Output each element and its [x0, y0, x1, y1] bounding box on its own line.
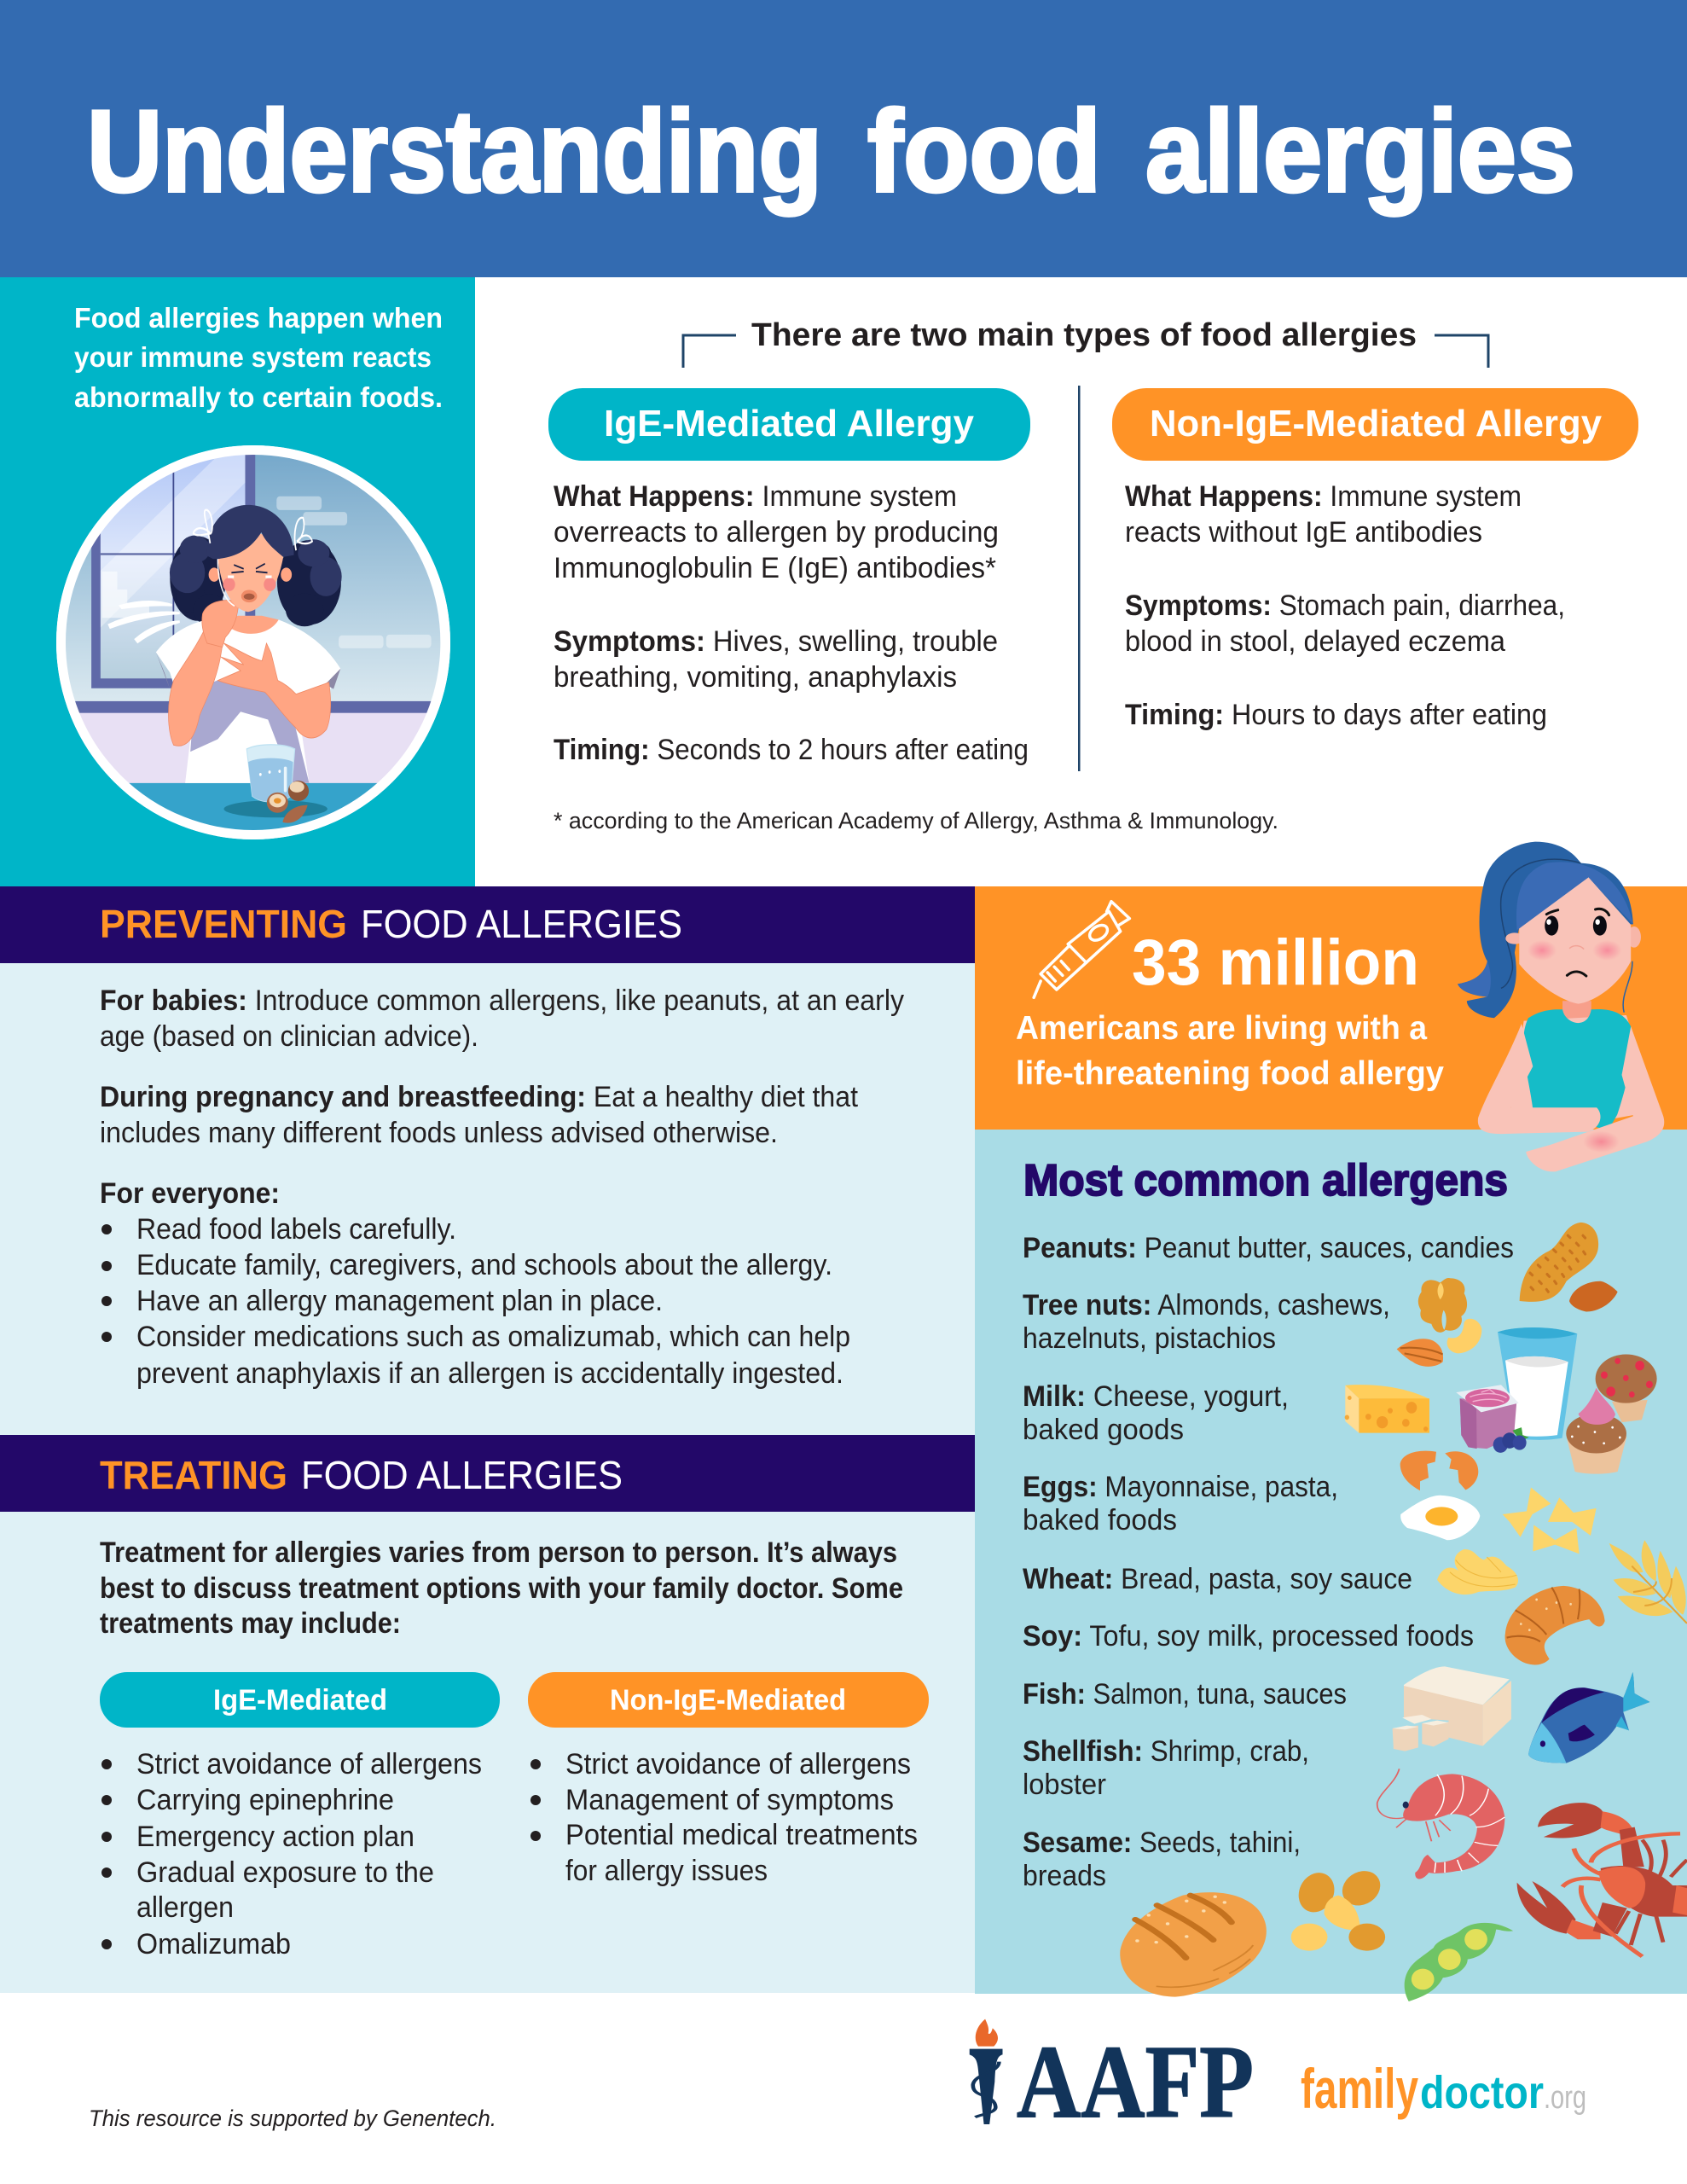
- header banner: [0, 0, 1687, 277]
- allergen list: Tree nuts: Almonds, cashews,: [1023, 1289, 1390, 1321]
- IgE details: [554, 480, 1029, 766]
- allergen list: baked foods: [1023, 1504, 1177, 1536]
- top hair: [207, 505, 294, 559]
- allergen list: Soy: Tofu, soy milk, processed foods: [1023, 1620, 1474, 1653]
- icon: tofu: [1393, 1666, 1511, 1751]
- IgE details: Symptoms: Hives, swelling, trouble: [554, 625, 998, 658]
- band heading: treating: FOOD ALLERGIES: [301, 1453, 623, 1497]
- pill heading: IgE-mediated: IgE-Mediated Allergy: [604, 403, 975, 444]
- stat text: life-threatening food allergy: [1016, 1055, 1444, 1092]
- non-IgE details: What Happens: Immune system: [1125, 480, 1522, 513]
- face: [217, 533, 283, 612]
- list: non-IgE treatments: for allergy issues: [565, 1855, 768, 1887]
- non-IgE details: blood in stool, delayed eczema: [1125, 625, 1505, 658]
- panel: Non-IgE-mediated allergy: [1112, 388, 1638, 731]
- illustration: foods upper: [1345, 1223, 1687, 1664]
- prevention advice: includes many different foods unless advised otherwise.: [100, 1117, 778, 1149]
- stat text: [1016, 926, 1444, 1092]
- allergen list: baked goods: [1023, 1414, 1184, 1446]
- treatment intro: best to discuss treatment options with your family doctor. Some: [100, 1572, 903, 1605]
- IgE details: Timing: Seconds to 2 hours after eating: [554, 734, 1029, 766]
- list: IgE treatments: [101, 1748, 482, 1960]
- allergen list: lobster: [1023, 1769, 1106, 1801]
- pill: non-IgE-mediated treatments: Non-IgE-Mediated: [610, 1684, 846, 1716]
- band heading: preventing: PREVENTING: [100, 902, 347, 946]
- list: for everyone: Have an allergy management plan in place.: [136, 1285, 663, 1317]
- panel: definition with coughing woman: [0, 277, 475, 886]
- prevention advice: During pregnancy and breastfeeding: Eat a healthy diet that: [100, 1081, 859, 1113]
- arm right (her left): [169, 624, 223, 746]
- hair ties: [194, 510, 212, 543]
- heading: two main types: There are two main types of food allergies: [751, 317, 1417, 353]
- list: IgE treatments: Carrying epinephrine: [136, 1784, 394, 1816]
- pill: IgE-mediated treatments: [100, 1672, 500, 1728]
- icon: lobster: [1517, 1803, 1687, 1956]
- prevention advice: age (based on clinician advice).: [100, 1020, 478, 1053]
- title: Understanding: [87, 86, 822, 216]
- band heading: preventing: [0, 886, 975, 963]
- icon: croissant: [1505, 1586, 1605, 1664]
- list: IgE treatments: Omalizumab: [136, 1928, 291, 1960]
- pill heading: IgE-mediated: [548, 388, 1030, 461]
- prevention advice: For babies: Introduce common allergens, like peanuts, at an early: [100, 985, 904, 1017]
- allergen list: Eggs: Mayonnaise, pasta,: [1023, 1471, 1338, 1503]
- allergen list: Shellfish: Shrimp, crab,: [1023, 1735, 1309, 1768]
- icon: muffin and cupcake: [1566, 1354, 1657, 1474]
- list: non-IgE treatments: Management of symptoms: [565, 1784, 894, 1816]
- icon: pasta: [1437, 1488, 1597, 1594]
- logo: familydoctor.org: [1301, 2057, 1586, 2120]
- title: food: [867, 86, 1101, 216]
- non-IgE details: [1125, 480, 1565, 731]
- heading: two main types: [683, 317, 1488, 368]
- pill: non-IgE-mediated treatments: [528, 1672, 929, 1728]
- allergen list: Wheat: Bread, pasta, soy sauce: [1023, 1563, 1412, 1595]
- icon: tree nuts: [1397, 1278, 1481, 1367]
- allergen list: breads: [1023, 1860, 1106, 1892]
- list: IgE treatments: Gradual exposure to the: [136, 1856, 434, 1889]
- icon: edamame pod: [1405, 1923, 1513, 2001]
- list: for everyone: Read food labels carefully.: [136, 1213, 456, 1246]
- list: for everyone: Educate family, caregivers, and schools about the allergy.: [136, 1249, 832, 1281]
- panel: IgE-mediated allergy: [548, 388, 1030, 766]
- allergen list: Milk: Cheese, yogurt,: [1023, 1380, 1289, 1413]
- panel: most common allergens: [975, 1130, 1687, 2001]
- heading: most common allergens: Most common allergens: [1023, 1156, 1508, 1205]
- icon: eggs: [1400, 1451, 1480, 1540]
- allergen list: [1023, 1232, 1514, 1892]
- intro text: your immune system reacts: [74, 341, 432, 373]
- allergen list: Fish: Salmon, tuna, sauces: [1023, 1678, 1347, 1711]
- panel: treating food allergies: [0, 1435, 975, 1993]
- title: [87, 86, 1575, 216]
- pill: IgE-mediated treatments: IgE-Mediated: [213, 1684, 387, 1716]
- treatment intro: Treatment for allergies varies from person to person. It’s always: [100, 1536, 897, 1569]
- prevention advice: For everyone:: [100, 1177, 280, 1210]
- logo: familydoctor.org: .org: [1544, 2080, 1586, 2116]
- non-IgE details: Timing: Hours to days after eating: [1125, 699, 1547, 731]
- footer logos: [970, 2019, 1586, 2140]
- footnote: * according to the American Academy of Allergy, Asthma & Immunology.: [554, 808, 1278, 834]
- band heading: treating: [0, 1435, 975, 1512]
- prevention advice: [100, 985, 904, 1210]
- pill heading: non-IgE: Non-IgE-Mediated Allergy: [1150, 403, 1603, 444]
- list: for everyone: [101, 1213, 850, 1390]
- icon: shrimp: [1377, 1769, 1504, 1879]
- panel: 33 million statistic: [975, 886, 1687, 1130]
- illustration: woman coughing: [56, 445, 457, 839]
- pill heading: non-IgE: [1112, 388, 1638, 461]
- support note: This resource is supported by Genentech.: [89, 2106, 496, 2131]
- list: for everyone: prevent anaphylaxis if an allergen is accidentally ingested.: [136, 1357, 844, 1390]
- illustration: woman with rash: [1458, 842, 1664, 1171]
- list: for everyone: Consider medications such as omalizumab, which can help: [136, 1321, 850, 1353]
- panel: preventing food allergies: [0, 886, 975, 1435]
- stat text: Americans are living with a: [1016, 1010, 1427, 1047]
- IgE details: What Happens: Immune system: [554, 480, 957, 513]
- back hair: [170, 537, 341, 626]
- logo: AAFP: AAFP: [1017, 2024, 1254, 2140]
- shirt and body: [156, 619, 340, 783]
- band heading: preventing: FOOD ALLERGIES: [361, 902, 682, 946]
- band heading: treating: TREATING: [100, 1453, 287, 1497]
- list: non-IgE treatments: [530, 1748, 918, 1887]
- stat text: 33 million: [1132, 926, 1419, 999]
- glass of water and nuts: [246, 745, 295, 802]
- icon: fish: [1528, 1672, 1649, 1763]
- intro text: [74, 302, 443, 413]
- icon: yogurt with berries: [1456, 1385, 1529, 1453]
- icon: peanut: [1520, 1223, 1618, 1311]
- illustration: foods lower: [1120, 1666, 1687, 2001]
- title: allergies: [1145, 86, 1575, 216]
- allergen list: Peanuts: Peanut butter, sauces, candies: [1023, 1232, 1514, 1264]
- non-IgE details: reacts without IgE antibodies: [1125, 516, 1482, 549]
- list: IgE treatments: allergen: [136, 1891, 234, 1924]
- intro text: Food allergies happen when: [74, 302, 443, 334]
- allergen list: hazelnuts, pistachios: [1023, 1322, 1276, 1355]
- icon: wheat: [1609, 1540, 1687, 1623]
- icon: sesame seeds: [1291, 1867, 1387, 1951]
- logo: familydoctor.org: doctor: [1420, 2067, 1544, 2118]
- icon: cheese: [1345, 1385, 1429, 1433]
- IgE details: breathing, vomiting, anaphylaxis: [554, 661, 957, 694]
- IgE details: overreacts to allergen by producing: [554, 516, 999, 549]
- list: IgE treatments: Emergency action plan: [136, 1821, 415, 1853]
- icon: bread: [1120, 1892, 1267, 1997]
- list: IgE treatments: Strict avoidance of allergens: [136, 1748, 482, 1780]
- icon: milk glass: [1498, 1327, 1577, 1440]
- non-IgE details: Symptoms: Stomach pain, diarrhea,: [1125, 590, 1565, 622]
- logo: familydoctor.org: family: [1301, 2057, 1418, 2120]
- list: non-IgE treatments: Strict avoidance of allergens: [565, 1748, 911, 1780]
- allergen list: Sesame: Seeds, tahini,: [1023, 1827, 1301, 1859]
- list: non-IgE treatments: Potential medical treatments: [565, 1819, 918, 1851]
- IgE details: Immunoglobulin E (IgE) antibodies*: [554, 552, 996, 584]
- treatment intro: [100, 1536, 903, 1640]
- intro text: abnormally to certain foods.: [74, 381, 443, 413]
- icon: epinephrine injector: [1034, 902, 1129, 997]
- treatment intro: treatments may include:: [100, 1607, 401, 1640]
